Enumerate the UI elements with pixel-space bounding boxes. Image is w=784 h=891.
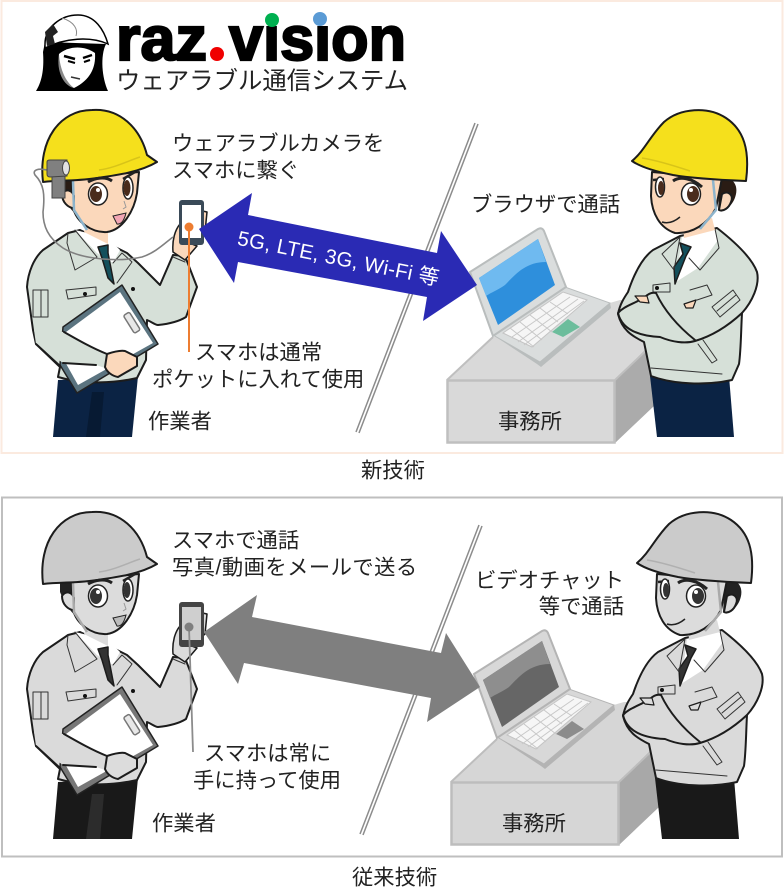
caption: conventional technology: 従来技術	[352, 866, 437, 890]
panel: new technology	[2, 1, 782, 453]
callout: video chat: 等で通話	[539, 594, 624, 618]
pockets and patches	[33, 257, 185, 317]
bottom scene	[27, 512, 763, 845]
logo subtitle: ウェアラブル通信システム	[116, 68, 408, 95]
logo icon: woman in helmet	[36, 15, 108, 91]
pants	[53, 376, 138, 437]
arrow: wireless link: 5G, LTE, 3G, Wi-Fi 等	[236, 227, 441, 290]
arrow: conventional link	[204, 595, 480, 722]
label: office: 事務所	[502, 812, 566, 836]
office desk	[447, 300, 655, 443]
callout: video chat: ビデオチャット	[475, 568, 624, 592]
logo wordmark: raz	[116, 5, 207, 74]
wearable camera and cable	[34, 160, 173, 260]
right worker	[623, 512, 763, 839]
caption: new technology: 新技術	[361, 458, 425, 482]
divider line	[356, 123, 478, 433]
label: office: 事務所	[498, 410, 562, 434]
callout: phone in pocket: スマホは通常	[195, 340, 322, 364]
left worker	[27, 110, 207, 437]
panel: conventional technology	[2, 498, 782, 856]
laptop	[470, 228, 611, 367]
neck	[683, 218, 715, 238]
callout: connect wearable camera: ウェアラブルカメラを	[172, 132, 384, 156]
shirt and tie	[676, 228, 718, 282]
label: worker: 作業者	[152, 812, 216, 836]
face	[88, 172, 135, 224]
shirt and tie	[75, 230, 120, 263]
helmet and head	[60, 180, 82, 218]
forearm	[34, 330, 107, 368]
logo wordmark: vision	[229, 5, 406, 74]
hand and phone	[173, 200, 207, 260]
divider line	[360, 525, 482, 835]
folded arms	[618, 293, 742, 342]
callout: talk in browser: ブラウザで通話	[471, 192, 620, 216]
collar	[662, 229, 719, 270]
office desk	[451, 702, 659, 845]
callout: phone in pocket: ポケットに入れて使用	[152, 368, 364, 392]
jacket	[27, 230, 197, 382]
lower hand	[105, 351, 137, 377]
callout: connect wearable camera: スマホに繋ぐ	[172, 158, 299, 182]
pants	[650, 376, 734, 437]
right worker	[618, 110, 758, 437]
callout: phone always in hand: 手に持って使用	[193, 768, 341, 792]
left worker	[27, 512, 207, 839]
clipboard	[60, 285, 158, 393]
helmet and head	[718, 178, 736, 210]
callout: phone call and mail: 写真/動画をメールで送る	[172, 556, 418, 580]
leader line: phone in pocket	[184, 222, 194, 352]
top scene	[27, 110, 758, 443]
jacket	[618, 228, 758, 383]
collar	[67, 230, 132, 283]
laptop	[474, 630, 615, 769]
leader line: phone in hand	[184, 622, 194, 752]
logo wordmark	[116, 5, 406, 74]
arrow: wireless link	[199, 193, 477, 321]
pockets and patches	[651, 283, 740, 374]
callout: phone call and mail: スマホで通話	[172, 528, 299, 552]
label: worker: 作業者	[148, 410, 212, 434]
face	[653, 177, 702, 223]
callout: phone always in hand: スマホは常に	[204, 742, 331, 766]
